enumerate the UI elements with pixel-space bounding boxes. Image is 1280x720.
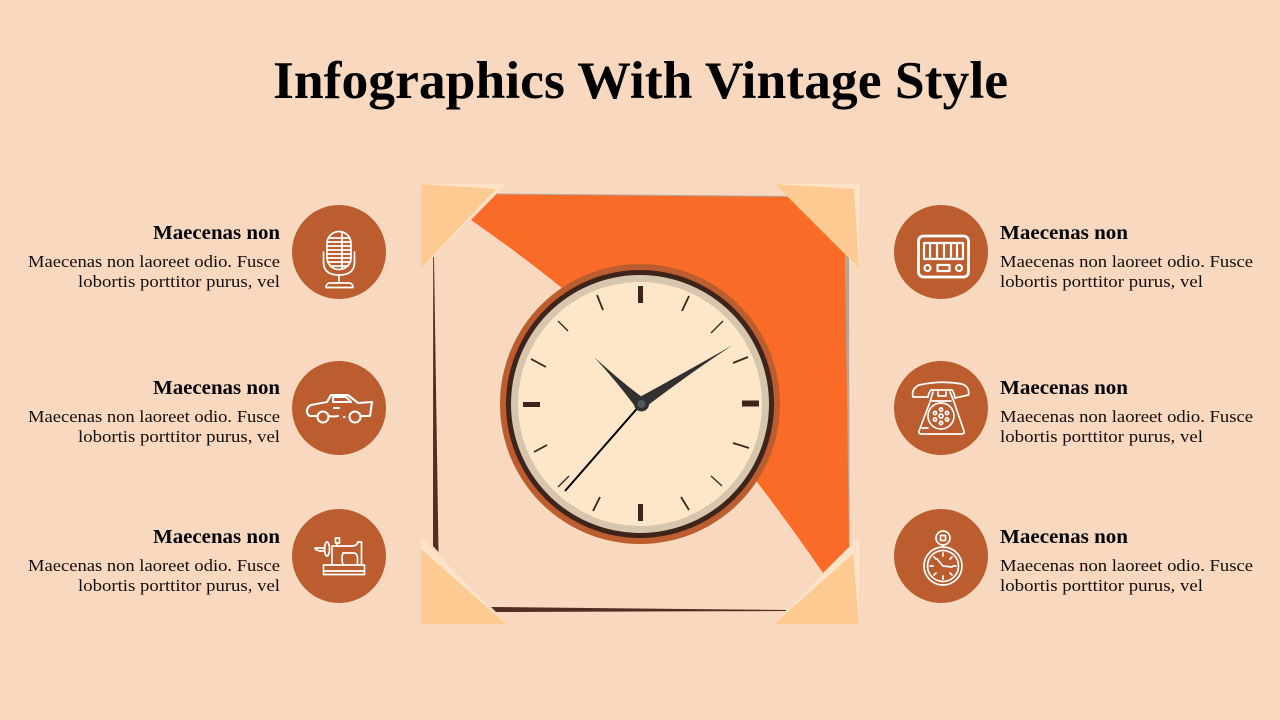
text block: Maecenas non laoreet odio. Fusce bbox=[1000, 252, 1253, 271]
panel: right item 2 telephone bbox=[894, 361, 1253, 455]
panel: central framed clock bbox=[421, 184, 859, 624]
heading: Maecenas non bbox=[153, 222, 281, 244]
text block: Maecenas non laoreet odio. Fusce bbox=[1000, 407, 1253, 426]
icon: microphone bbox=[292, 205, 386, 299]
text block bbox=[28, 407, 280, 446]
corner: bottom left bbox=[421, 537, 506, 624]
text block bbox=[28, 252, 280, 291]
corner: top right bbox=[775, 184, 859, 268]
text block: Maecenas non laoreet odio. Fusce bbox=[28, 556, 280, 575]
text block bbox=[1000, 556, 1253, 595]
text block: lobortis porttitor purus, vel bbox=[78, 427, 280, 446]
panel: right item 1 radio bbox=[894, 205, 1253, 299]
heading: Maecenas non bbox=[1000, 222, 1129, 244]
icon: pocket watch bbox=[894, 509, 988, 603]
panel: left item 2 car bbox=[28, 361, 386, 455]
text block: lobortis porttitor purus, vel bbox=[1000, 427, 1203, 446]
icon: vintage car bbox=[292, 361, 386, 455]
text block bbox=[1000, 252, 1253, 291]
text block: Maecenas non laoreet odio. Fusce bbox=[28, 407, 280, 426]
hour markers bbox=[523, 286, 759, 521]
panel: left item 1 microphone bbox=[28, 205, 386, 299]
panel: left item 3 sewing machine bbox=[28, 509, 386, 603]
text block: Maecenas non laoreet odio. Fusce bbox=[1000, 556, 1253, 575]
corner: top left bbox=[421, 184, 506, 268]
clock bbox=[500, 264, 780, 544]
panel: right item 3 pocket watch bbox=[894, 509, 1253, 603]
heading: Maecenas non bbox=[153, 526, 281, 548]
text block: lobortis porttitor purus, vel bbox=[1000, 272, 1203, 291]
text block: lobortis porttitor purus, vel bbox=[78, 272, 280, 291]
orange swoosh bbox=[471, 194, 849, 573]
icon: telephone bbox=[894, 361, 988, 455]
photo frame outline bbox=[433, 194, 850, 612]
minute hand bbox=[636, 345, 733, 409]
text block bbox=[1000, 407, 1253, 446]
corner: bottom right bbox=[774, 537, 859, 624]
heading: Maecenas non bbox=[153, 377, 281, 399]
icon: sewing machine bbox=[292, 509, 386, 603]
text block: Maecenas non laoreet odio. Fusce bbox=[28, 252, 280, 271]
text block: lobortis porttitor purus, vel bbox=[1000, 576, 1203, 595]
text block bbox=[28, 556, 280, 595]
heading: Maecenas non bbox=[1000, 377, 1129, 399]
clock hub bbox=[634, 396, 649, 412]
title: Infographics With Vintage Style bbox=[273, 52, 1008, 110]
second hand bbox=[565, 404, 641, 491]
text block: lobortis porttitor purus, vel bbox=[78, 576, 280, 595]
minute ticks bbox=[531, 295, 749, 511]
icon: radio bbox=[894, 205, 988, 299]
heading: Maecenas non bbox=[1000, 526, 1129, 548]
hour hand bbox=[594, 357, 646, 409]
